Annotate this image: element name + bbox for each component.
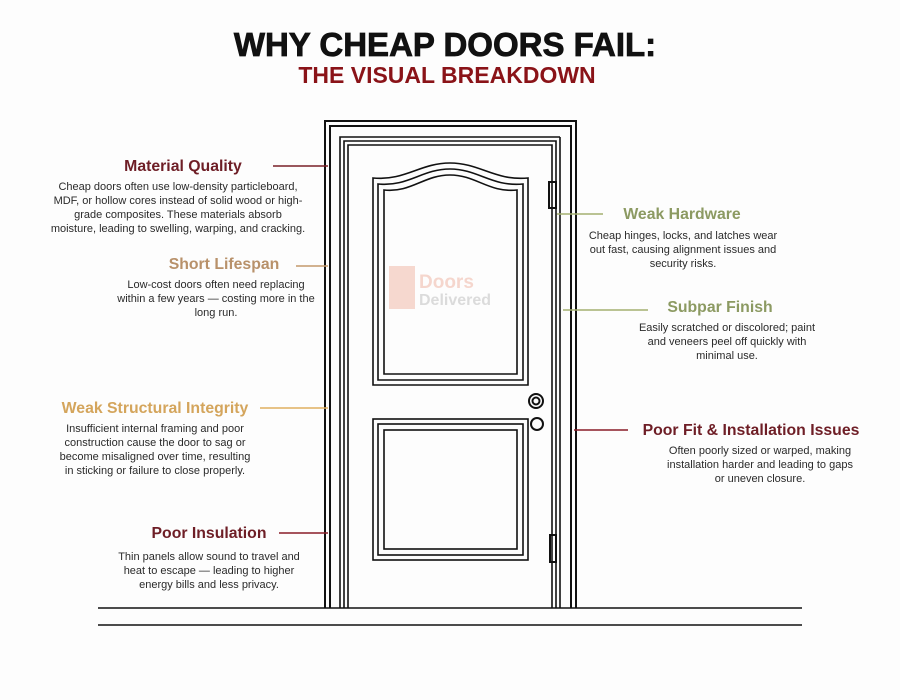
callout: Weak Structural Integrity: in sticking or failure to close properly. — [65, 465, 245, 477]
callout: Weak Structural Integrity: Insufficient internal framing and poor — [66, 423, 244, 435]
callout: Poor Insulation: Poor Insulation — [152, 525, 266, 542]
outer frame — [325, 121, 576, 608]
callout: Weak Hardware: Weak Hardware — [623, 206, 741, 223]
callout: Subpar Finish: minimal use. — [696, 350, 758, 362]
callout: Poor Fit & Installation Issues — [643, 422, 860, 485]
callout: Poor Fit & Installation Issues: installation harder and leading to gaps — [667, 459, 853, 471]
callout: Poor Fit & Installation Issues: Poor Fit & Installation Issues — [643, 422, 860, 439]
door illustration — [98, 121, 802, 625]
title: THE VISUAL BREAKDOWN — [298, 62, 596, 88]
callout: Weak Hardware — [589, 206, 777, 270]
callout: Material Quality: Material Quality — [124, 158, 242, 175]
floor lines — [98, 608, 802, 625]
title — [234, 26, 656, 88]
hinges — [549, 182, 556, 562]
callout: Subpar Finish — [639, 299, 815, 362]
title: WHY CHEAP DOORS FAIL: — [234, 26, 656, 63]
watermark logo: Doors — [419, 272, 474, 293]
watermark logo: Delivered — [419, 292, 491, 309]
callout: Subpar Finish: Subpar Finish — [667, 299, 773, 316]
callout: Poor Insulation: heat to escape — leading to higher — [124, 565, 295, 577]
callout: Weak Hardware: out fast, causing alignment issues and — [590, 244, 776, 256]
callout: Short Lifespan — [116, 256, 315, 319]
callout: Poor Insulation: energy bills and less privacy. — [139, 579, 279, 591]
callout: Poor Insulation: Thin panels allow sound to travel and — [118, 551, 300, 563]
callout: Poor Fit & Installation Issues: or uneven closure. — [715, 473, 805, 485]
callout: Poor Fit & Installation Issues: Often poorly sized or warped, making — [669, 445, 851, 457]
callout: Material Quality: grade composites. These materials absorb — [74, 209, 282, 221]
callout: Material Quality: Cheap doors often use low-density particleboard, — [58, 181, 298, 193]
callout: Poor Insulation — [118, 525, 300, 591]
callout: Material Quality: moisture, leading to swelling, warping, and cracking. — [51, 223, 305, 235]
callout: Subpar Finish: and veneers peel off quickly with — [648, 336, 806, 348]
callout: Short Lifespan: long run. — [195, 307, 237, 319]
casing — [340, 137, 560, 608]
lower panel — [373, 419, 528, 560]
callout: Weak Hardware: security risks. — [650, 258, 716, 270]
callout: Short Lifespan: Low-cost doors often need replacing — [127, 279, 305, 291]
leader lines — [260, 166, 648, 533]
callout: Weak Structural Integrity — [60, 400, 250, 477]
callout: Weak Structural Integrity: Weak Structural Integrity — [62, 400, 249, 417]
upper panel — [373, 163, 528, 385]
callout: Material Quality — [51, 158, 305, 235]
callout: Weak Structural Integrity: become misaligned over time, resulting — [60, 451, 250, 463]
callout: Short Lifespan: Short Lifespan — [169, 256, 279, 273]
callout: Weak Structural Integrity: construction cause the door to sag or — [64, 437, 246, 449]
watermark logo — [389, 266, 491, 309]
callout: Short Lifespan: within a few years — costing more in the — [116, 293, 315, 305]
knob and lock — [529, 394, 543, 430]
callout: Weak Hardware: Cheap hinges, locks, and latches wear — [589, 230, 777, 242]
callout: Subpar Finish: Easily scratched or discolored; paint — [639, 322, 815, 334]
callout: Material Quality: MDF, or hollow cores instead of solid wood or high- — [54, 195, 303, 207]
